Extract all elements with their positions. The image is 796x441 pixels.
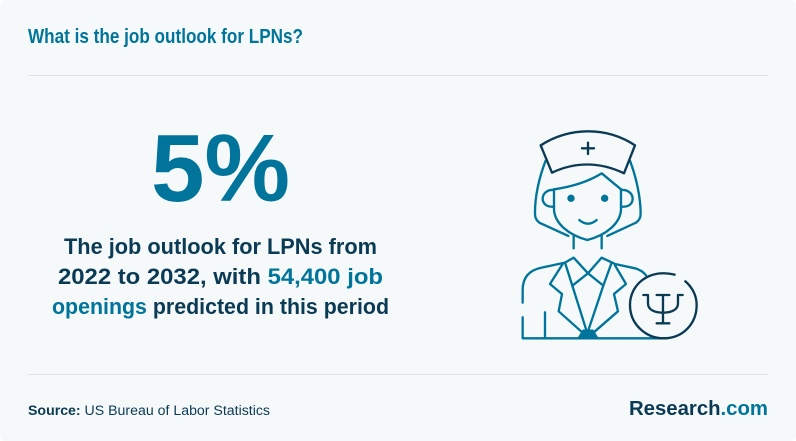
description text: openings predicted in this period — [52, 294, 389, 319]
logo: Research.com: Research.com — [629, 398, 768, 420]
icon: nurse with psychology symbol — [523, 131, 697, 338]
nurse cap — [541, 131, 635, 173]
nurse uniform — [523, 258, 667, 338]
title: What is the job outlook for LPNs? — [28, 25, 303, 48]
nurse hair, face and ears — [535, 161, 641, 248]
nurse eyes — [567, 195, 608, 202]
description text: The job outlook for LPNs from — [64, 234, 377, 259]
big statistic: 5% — [151, 115, 290, 222]
psychology badge — [630, 273, 697, 338]
description text: 2022 to 2032, with 54,400 job — [58, 264, 383, 289]
description text — [52, 234, 389, 319]
source note: Source: US Bureau of Labor Statistics — [28, 403, 270, 418]
